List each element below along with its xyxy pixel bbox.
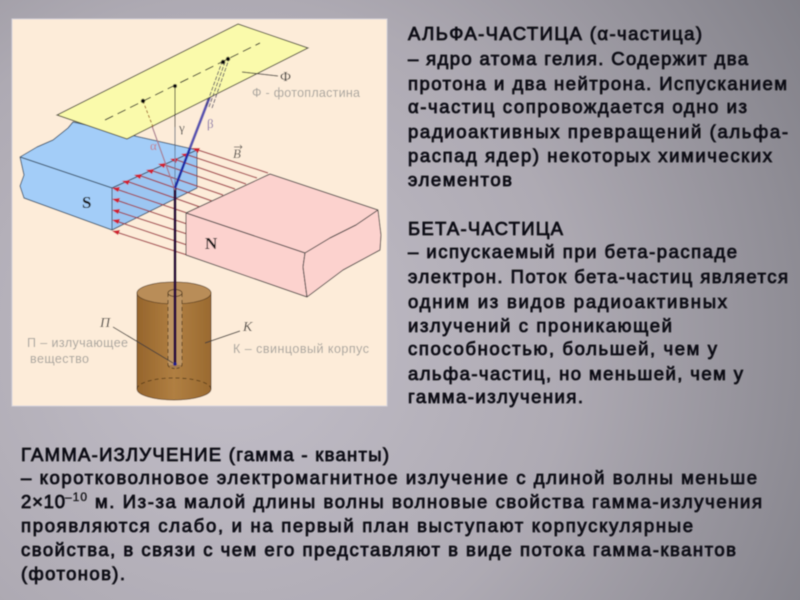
field arrowheads — [112, 148, 200, 235]
text block: gamma radiation: проявляются слабо, и на первый план выступают корпускулярные — [21, 515, 693, 536]
text block: gamma radiation: ГАММА-ИЗЛУЧЕНИЕ (гамма - кванты) — [21, 444, 389, 465]
diagram labels: Ф — [280, 70, 291, 85]
photographic plate — [57, 24, 308, 139]
text block: alpha particle: α-частиц сопровождается одно из — [408, 96, 747, 117]
text block: alpha particle: радиоактивных превращений (альфа- — [408, 121, 788, 142]
text block: alpha particle: распад ядер) некоторых химических — [408, 145, 773, 166]
magnetic field lines — [116, 150, 268, 255]
diagram labels: К – свинцовый корпус — [233, 342, 369, 356]
text block: beta particle: способностью, большей, чем у — [408, 338, 718, 359]
text block: beta particle: гамма-излучения. — [408, 386, 583, 407]
text block: alpha particle: протона и два нейтрона. Испусканием — [408, 73, 787, 94]
panel: diagram — [12, 19, 387, 406]
text block: beta particle: одним из видов радиоактивных — [408, 291, 728, 312]
leader lines — [113, 72, 278, 363]
text block: beta particle: – испускаемый при бета-распаде — [408, 241, 737, 262]
diagram labels: N — [205, 234, 218, 253]
text block: alpha particle: – ядро атома гелия. Содержит два — [408, 48, 749, 69]
lead cylinder — [137, 282, 211, 400]
diagram labels: П – излучающее — [27, 336, 128, 350]
diagram labels: γ — [178, 120, 185, 135]
text block: gamma radiation: –10 — [65, 490, 87, 504]
text block: beta particle — [408, 218, 788, 407]
text block: gamma radiation: м. Из-за малой длины волны волновые свойства гамма-излучения — [95, 491, 762, 512]
diagram labels: β — [207, 116, 214, 131]
diagram labels: S — [82, 193, 91, 212]
text block: gamma radiation — [21, 444, 762, 584]
text block: gamma radiation: (фотонов). — [21, 563, 125, 584]
text block: beta particle: БЕТА-ЧАСТИЦА — [408, 218, 564, 239]
text block: gamma radiation: свойства, в связи с чем его представляют в виде потока гамма-квантов — [21, 539, 736, 560]
text block: beta particle: альфа-частиц, но меньшей, чем у — [408, 363, 744, 384]
text block: alpha particle — [408, 23, 788, 190]
diagram labels — [27, 70, 369, 366]
diagram labels: Ф - фотопластина — [252, 86, 360, 100]
text block: alpha particle: элементов — [408, 169, 512, 190]
gamma and merged beam — [143, 86, 210, 363]
text block: beta particle: электрон. Поток бета-частиц является — [408, 266, 788, 287]
text block: alpha particle: АЛЬФА-ЧАСТИЦА (α-частица) — [408, 23, 702, 44]
text block: beta particle: излучений с проникающей — [408, 315, 672, 336]
diagram labels: П — [99, 316, 111, 331]
diagram labels: B — [233, 146, 241, 161]
diagram labels: К — [242, 320, 253, 335]
text block: gamma radiation: – коротковолновое электромагнитное излучение с длиной волны меньше — [21, 467, 757, 488]
diagram labels: вещество — [30, 352, 89, 366]
text block: gamma radiation: 2×10 — [21, 491, 65, 512]
magnet S — [20, 122, 197, 230]
diagram labels: α — [150, 138, 157, 153]
magnet N — [186, 174, 381, 297]
